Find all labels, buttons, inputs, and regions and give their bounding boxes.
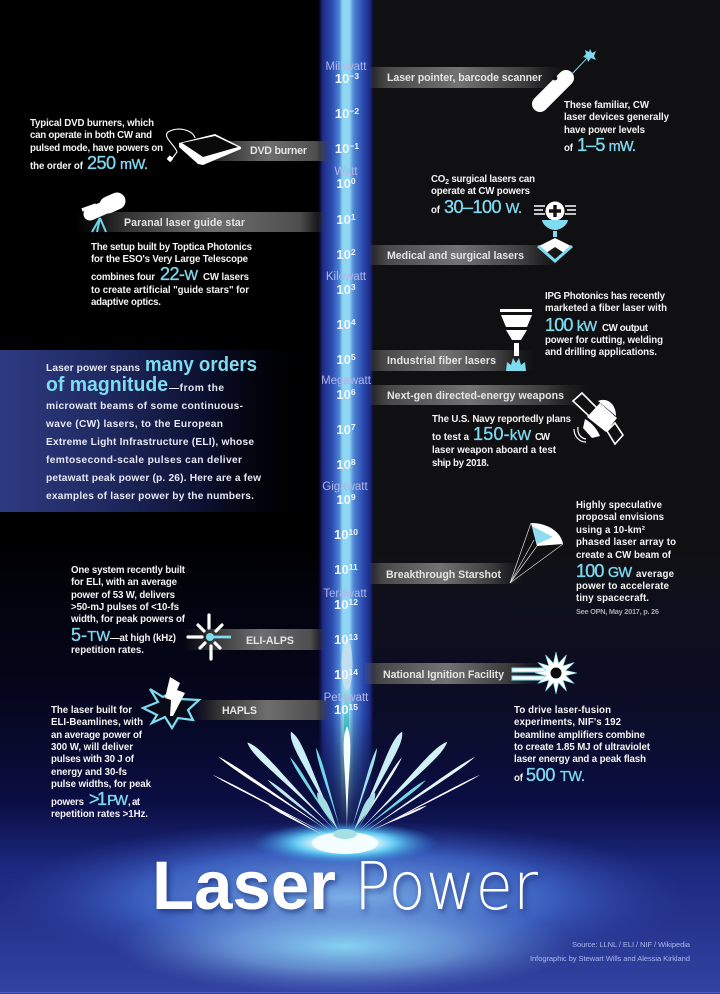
10^0: 10 [336, 176, 351, 191]
panel: intro text: Laser power spans [46, 363, 140, 374]
description: 100 GW [576, 561, 632, 581]
description: adaptive optics. [91, 297, 161, 308]
description: to create 1.85 MJ of ultraviolet [514, 742, 651, 753]
description: average [636, 569, 675, 580]
band [365, 663, 545, 684]
description: have power levels [564, 125, 645, 136]
description: >50-mJ pulses of <10-fs [71, 602, 179, 613]
description: ELI-Beamlines, with [51, 717, 143, 728]
panel: medical and surgical lasers [370, 174, 576, 265]
panel: ELI-ALPS [70, 565, 325, 659]
description: proposal envisions [576, 512, 664, 523]
description [432, 414, 571, 469]
10^10: 10 [334, 527, 348, 542]
band label: Paranal laser guide star [124, 217, 245, 229]
unit: megawatt: Megawatt [321, 375, 372, 387]
description [70, 565, 186, 656]
description: CO [431, 174, 445, 185]
description: 30–100 W. [444, 197, 522, 217]
band label: Breakthrough Starshot [386, 569, 501, 581]
description: 150-kW [473, 424, 531, 444]
10^1: 10 [336, 212, 351, 227]
unit: terawatt: Terawatt [323, 588, 368, 600]
description: marketed a fiber laser with [545, 303, 667, 314]
credits: Source: LLNL / ELI / NIF / Wikipedia [572, 940, 691, 949]
description: pulsed mode, have powers on [30, 143, 163, 154]
10^-2: 10 [335, 106, 349, 121]
description: surgical lasers can [449, 174, 535, 185]
description: power of 53 W, delivers [71, 590, 175, 601]
10^13: 10 [334, 632, 348, 647]
panel: intro text: —from the [169, 383, 224, 394]
description [91, 242, 252, 308]
description: 1–5 mW. [577, 135, 636, 155]
icon: surgical laser [534, 202, 576, 261]
10^9: 10 [336, 492, 351, 507]
description: powers [51, 797, 84, 808]
description: for the ESO's Very Large Telescope [91, 254, 249, 265]
power scale [321, 61, 372, 717]
description [576, 500, 676, 616]
10^6: 10 [336, 387, 351, 402]
10^-3: −3 [349, 71, 359, 81]
description: The U.S. Navy reportedly plans [432, 414, 571, 425]
band [195, 141, 330, 161]
panel: intro text: many orders [145, 353, 257, 376]
panel: National Ignition Facility [365, 652, 651, 785]
unit: gigawatt: Gigawatt [322, 481, 368, 493]
description: operate at CW powers [431, 186, 530, 197]
description: beamline amplifiers combine [514, 730, 646, 741]
icon: ELI burst [188, 615, 231, 659]
10^8: 8 [351, 457, 356, 467]
description: laser devices generally [564, 112, 670, 123]
panel: HAPLS [51, 677, 330, 820]
description: 300 W, will deliver [51, 742, 133, 753]
panel: Breakthrough Starshot [370, 500, 676, 616]
description [431, 174, 535, 217]
description: The laser built for [51, 705, 132, 716]
icon: laser pointer [540, 49, 596, 104]
description: power to accelerate [576, 581, 670, 592]
10^14: 10 [334, 667, 348, 682]
title: Power [354, 848, 539, 925]
band label: National Ignition Facility [383, 669, 504, 681]
description [51, 705, 152, 820]
icon: NIF flash [512, 652, 577, 694]
description: can operate in both CW and [30, 130, 152, 141]
description: phased laser array to [576, 537, 676, 548]
description: tiny spacecraft. [576, 593, 649, 604]
description: create a CW beam of [576, 550, 672, 561]
description: , at [128, 797, 141, 808]
10^10: 10 [348, 527, 358, 537]
10^11: 11 [349, 562, 358, 572]
panel: DVD burner [30, 118, 330, 173]
band label: Laser pointer, barcode scanner [387, 72, 542, 84]
description [514, 705, 651, 785]
panel: intro text: femtosecond-scale pulses can deliver [46, 455, 242, 466]
description: of [514, 773, 524, 784]
description: repetition rates >1Hz. [51, 809, 148, 820]
icon: fiber laser cutter [500, 309, 532, 371]
description: ship by 2018. [432, 458, 489, 469]
description: laser energy and a peak flash [514, 754, 646, 765]
10^5: 5 [351, 352, 356, 362]
10^-1: 10 [335, 141, 349, 156]
description: See OPN, May 2017, p. 26 [576, 607, 659, 616]
description: 2 [445, 179, 449, 186]
panel: intro text: petawatt peak power (p. 26). Here are a few [46, 473, 261, 484]
description: repetition rates. [71, 645, 144, 656]
description: pulse widths, for peak [51, 779, 152, 790]
description: >1 PW [89, 789, 128, 809]
panel: Paranal laser guide star [75, 201, 325, 308]
description: of [564, 143, 574, 154]
description: combines four [91, 272, 155, 283]
description: Typical DVD burners, which [30, 118, 154, 129]
10^12: 12 [348, 597, 358, 607]
description: 22-W [160, 264, 198, 284]
panel: directed-energy weapons [370, 385, 623, 469]
description: CW [535, 432, 551, 443]
10^4: 10 [336, 317, 351, 332]
band label: DVD burner [250, 145, 307, 157]
band [75, 212, 325, 232]
credits [530, 940, 691, 963]
credits: Infographic by Stewart Wills and Alessia Kirkland [530, 954, 690, 963]
panel: intro text: Extreme Light Infrastructure (ELI), whose [46, 437, 254, 448]
description: power for cutting, welding [545, 335, 663, 346]
laser beam [318, 0, 374, 830]
band label: Next-gen directed-energy weapons [387, 390, 564, 402]
10^6: 6 [351, 387, 356, 397]
description: These familiar, CW [564, 100, 650, 111]
unit: kilowatt: Kilowatt [326, 271, 367, 283]
panel: intro background [0, 350, 312, 512]
10^15: 15 [348, 702, 358, 712]
10^12: 10 [334, 597, 348, 612]
panel: intro text: examples of laser power by the numbers. [46, 491, 254, 502]
10^-3: 10 [335, 71, 349, 86]
icon: satellite [573, 393, 623, 444]
10^3: 10 [336, 282, 351, 297]
panel: industrial fiber lasers [370, 291, 667, 371]
10^2: 10 [336, 247, 351, 262]
description: 500 TW. [526, 765, 585, 785]
description: CW output [602, 323, 649, 334]
description: to create artificial "guide stars" for [91, 285, 249, 296]
10^3: 3 [351, 282, 356, 292]
description: 250 mW. [87, 153, 148, 173]
panel: intro text: wave (CW) lasers, to the European [45, 419, 223, 430]
10^13: 13 [348, 632, 358, 642]
band [370, 385, 592, 405]
icon: DVD burner [167, 129, 241, 165]
description: 5-TW [71, 625, 110, 645]
10^-2: −2 [349, 106, 359, 116]
description [545, 291, 667, 358]
description: pulses with 30 J of [51, 754, 135, 765]
description: CW lasers [203, 272, 249, 283]
band label: Industrial fiber lasers [387, 355, 496, 367]
unit: milliwatt: Milliwatt [326, 61, 367, 73]
band [370, 67, 567, 88]
panel: intro text [45, 353, 261, 502]
icon: lightning star [143, 677, 199, 728]
10^1: 1 [351, 212, 356, 222]
unit: petawatt: Petawatt [324, 692, 369, 704]
description: to test a [432, 432, 470, 443]
description: energy and 30-fs [51, 767, 127, 778]
panel: intro text: microwatt beams of some continuous- [46, 401, 243, 412]
description: the order of [30, 161, 84, 172]
10^8: 10 [336, 457, 351, 472]
band [190, 700, 330, 720]
description: an average power of [51, 730, 143, 741]
panel: laser pointer [370, 49, 670, 155]
band [370, 350, 535, 371]
description: using a 10-km² [576, 525, 646, 536]
band label: ELI-ALPS [246, 635, 294, 647]
description: and drilling applications. [545, 347, 657, 358]
10^4: 4 [351, 317, 356, 327]
description: 100 kW [545, 315, 597, 335]
band [370, 245, 565, 265]
description: experiments, NIF's 192 [514, 717, 621, 728]
icon: light sail [510, 523, 563, 583]
description [30, 118, 163, 173]
icon: telescope [82, 201, 117, 232]
10^15: 10 [334, 702, 348, 717]
title [152, 847, 539, 925]
description: for ELI, with an average [71, 577, 178, 588]
band label: HAPLS [222, 705, 257, 717]
description: The setup built by Toptica Photonics [91, 242, 252, 253]
10^0: 0 [351, 176, 356, 186]
description: Highly speculative [576, 500, 663, 511]
10^-1: −1 [349, 141, 359, 151]
10^7: 7 [351, 422, 356, 432]
10^5: 10 [336, 352, 351, 367]
description: To drive laser-fusion [514, 705, 611, 716]
10^11: 10 [334, 562, 349, 577]
description: One system recently built [71, 565, 186, 576]
description: of [431, 205, 441, 216]
unit: watt: Watt [334, 166, 358, 178]
description: laser weapon aboard a test [432, 445, 557, 456]
band [182, 629, 325, 650]
description: width, for peak powers of [70, 614, 186, 625]
title: Laser [152, 847, 336, 924]
impact burst [213, 726, 480, 864]
description [564, 100, 670, 155]
10^9: 9 [351, 492, 356, 502]
band [370, 563, 525, 584]
10^7: 10 [336, 422, 351, 437]
panel: intro text: of magnitude [46, 373, 168, 396]
description: —at high (kHz) [110, 633, 176, 644]
10^2: 2 [351, 247, 356, 257]
description: IPG Photonics has recently [545, 291, 666, 302]
band label: Medical and surgical lasers [387, 250, 524, 262]
10^14: 14 [348, 667, 358, 677]
